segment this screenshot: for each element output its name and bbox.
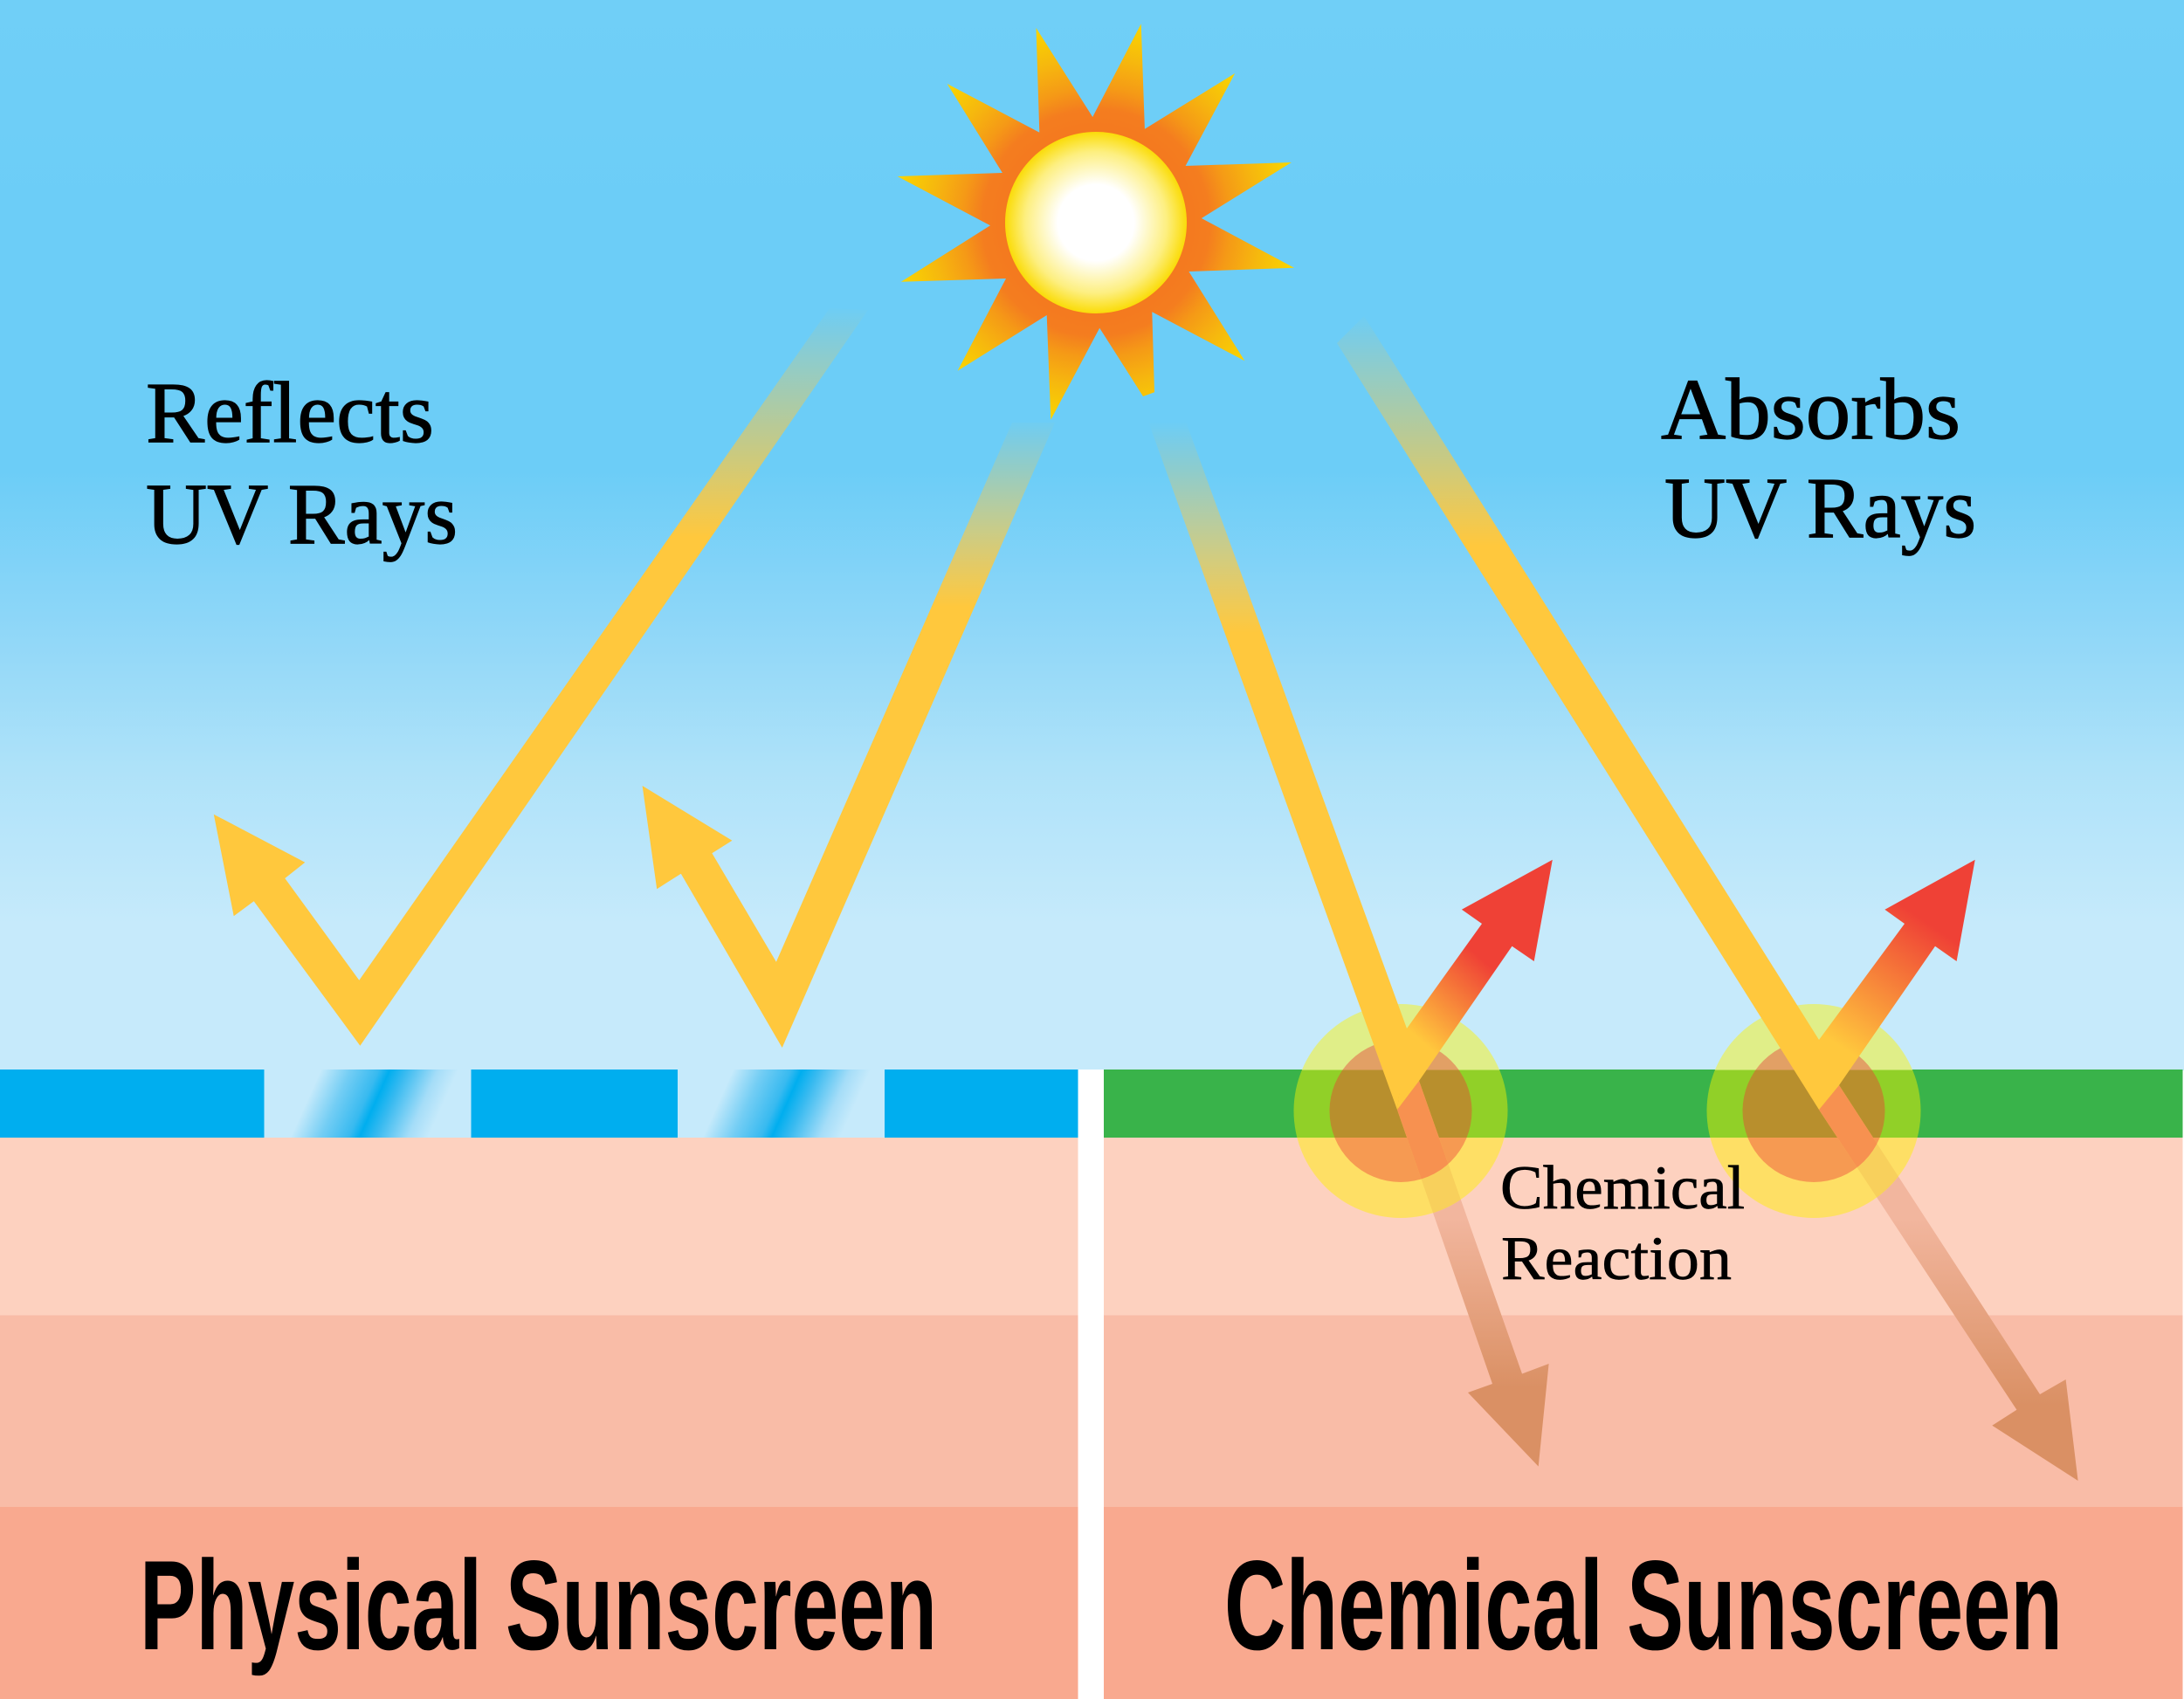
text: absorbs UV rays (1661, 361, 1976, 556)
sky background (0, 0, 2184, 1070)
text: chemical reaction (1500, 1154, 1745, 1293)
arrow: penetrating ray stem 1 (1397, 1081, 1549, 1467)
text: absorbs UV rays: Absorbs (1661, 361, 1960, 457)
chemical reaction circle left (1294, 1004, 1507, 1218)
arrow: red re-emitted ray 1 (1397, 860, 1553, 1110)
skin layers right (1104, 1138, 2183, 1699)
chemical reaction circle right (1706, 1004, 1921, 1218)
icon: sun (898, 24, 1294, 420)
arrow: penetrating ray stem 2 (1819, 1085, 2078, 1481)
heading: physical sunscreen: Physical Sunscreen (140, 1534, 937, 1676)
sun rays (898, 24, 1294, 420)
text: absorbs UV rays: UV Rays (1664, 459, 1976, 556)
text: reflects UV rays: UV Rays (146, 465, 458, 562)
white divider between panels (1078, 1070, 1104, 1699)
arrow: red re-emitted ray 2 (1819, 860, 1975, 1110)
chemical sunscreen film layer (1104, 1070, 2183, 1138)
arrow: incoming UV ray 1 (1148, 422, 1408, 1110)
arrow: reflected UV ray 1 (214, 308, 868, 1046)
arrow: reflected UV ray 2 (643, 423, 1055, 1048)
panel: chemical sunscreen skin and film (1104, 1070, 2183, 1699)
physical sunscreen film layer (0, 1070, 1078, 1138)
arrow: incoming UV ray 2 (1337, 316, 1819, 1110)
panel: physical sunscreen skin and film (0, 1070, 1078, 1699)
text: chemical reaction: Chemical (1500, 1154, 1745, 1222)
text: reflects UV rays: Reflects (146, 364, 434, 461)
sun disc (1005, 132, 1187, 313)
skin layers left (0, 1138, 1078, 1699)
text: reflects UV rays (146, 364, 458, 562)
text: chemical reaction: Reaction (1501, 1225, 1732, 1293)
